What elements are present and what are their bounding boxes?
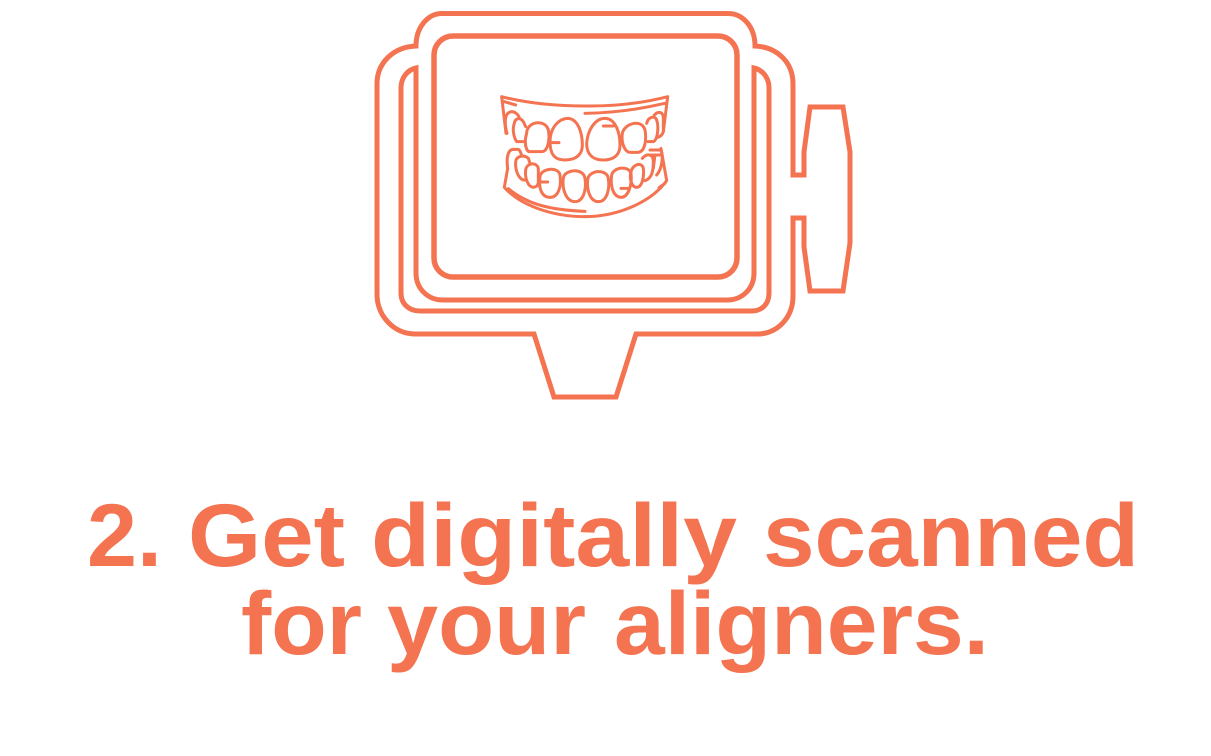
heading line 1: Get (188, 485, 345, 585)
scanner inner frame (401, 68, 769, 311)
heading line 2: your (387, 573, 586, 673)
heading line 1 (87, 485, 1139, 585)
scanner screen (434, 36, 737, 277)
heading line 1: 2. (87, 485, 162, 585)
teeth right half (585, 97, 668, 217)
scanner outer body with handle and tip (377, 14, 850, 397)
heading line 1: scanned (763, 485, 1139, 585)
icon: digital scanner (377, 14, 850, 397)
heading line 2 (241, 573, 989, 673)
heading (87, 485, 1139, 673)
icon: teeth scan (502, 97, 668, 217)
heading line 1: digitally (371, 485, 738, 585)
heading line 2: aligners. (614, 573, 989, 673)
teeth left half (502, 97, 585, 217)
heading line 2: for (241, 573, 362, 673)
